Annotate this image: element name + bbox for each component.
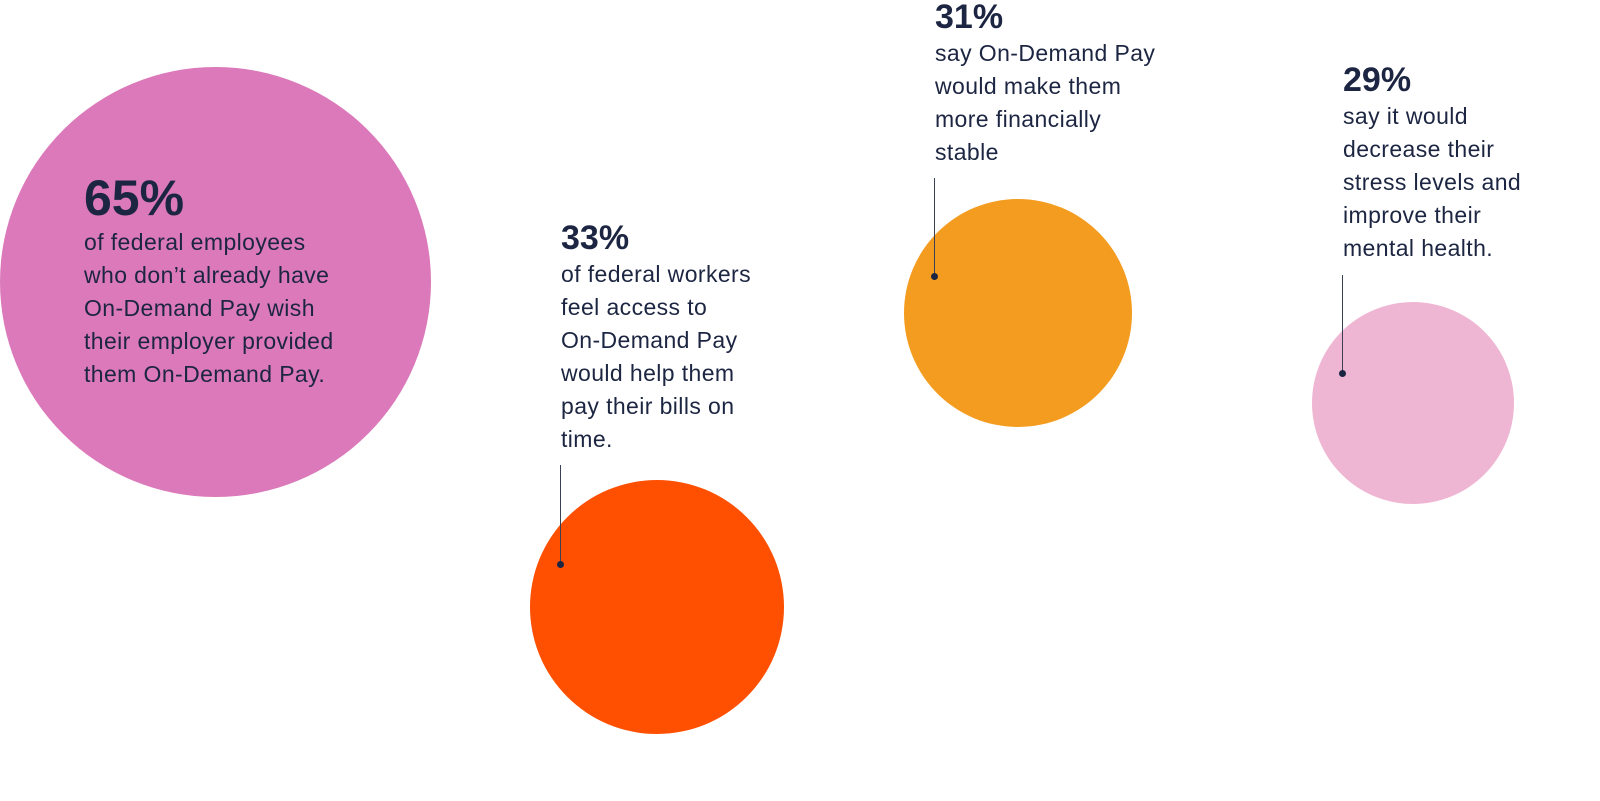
text: 29% stat: improve their: [1343, 202, 1481, 228]
circle: 31%: [904, 199, 1132, 427]
text: 65% stat: [84, 170, 334, 387]
text: 29% stat: 29%: [1343, 61, 1411, 99]
dot: 29%: [1339, 370, 1346, 377]
pointer: 29%: [1342, 275, 1343, 373]
text: 33% stat: feel access to: [561, 294, 707, 320]
text: 31% stat: would make them: [935, 73, 1121, 99]
text: 33% stat: pay their bills on: [561, 393, 734, 419]
text: 29% stat: [1343, 61, 1521, 261]
text: 29% stat: decrease their: [1343, 136, 1494, 162]
text: 31% stat: [935, 0, 1155, 165]
dot: 31%: [931, 273, 938, 280]
text: 65% stat: 65%: [84, 170, 184, 226]
text: 33% stat: On-Demand Pay: [561, 327, 738, 353]
text: 31% stat: more financially: [935, 106, 1101, 132]
text: 29% stat: mental health.: [1343, 235, 1493, 261]
text: 31% stat: say On-Demand Pay: [935, 40, 1155, 66]
text: 33% stat: time.: [561, 426, 613, 452]
pointer: 33%: [560, 465, 561, 564]
text: 65% stat: their employer provided: [84, 328, 334, 354]
text: 31% stat: stable: [935, 139, 999, 165]
text: 29% stat: stress levels and: [1343, 169, 1521, 195]
dot: 33%: [557, 561, 564, 568]
text: 33% stat: 33%: [561, 219, 629, 257]
pointer: 31%: [934, 178, 935, 276]
text: 65% stat: of federal employees: [84, 229, 306, 255]
text: 33% stat: would help them: [561, 360, 734, 386]
text: 33% stat: [561, 219, 751, 452]
text: 65% stat: On-Demand Pay wish: [84, 295, 315, 321]
circle: 29%: [1312, 302, 1514, 504]
circle: 33%: [530, 480, 784, 734]
circle: 65%: [0, 67, 431, 497]
text: 65% stat: who don’t already have: [84, 262, 329, 288]
text: 33% stat: of federal workers: [561, 261, 751, 287]
text: 65% stat: them On-Demand Pay.: [84, 361, 325, 387]
text: 29% stat: say it would: [1343, 103, 1468, 129]
